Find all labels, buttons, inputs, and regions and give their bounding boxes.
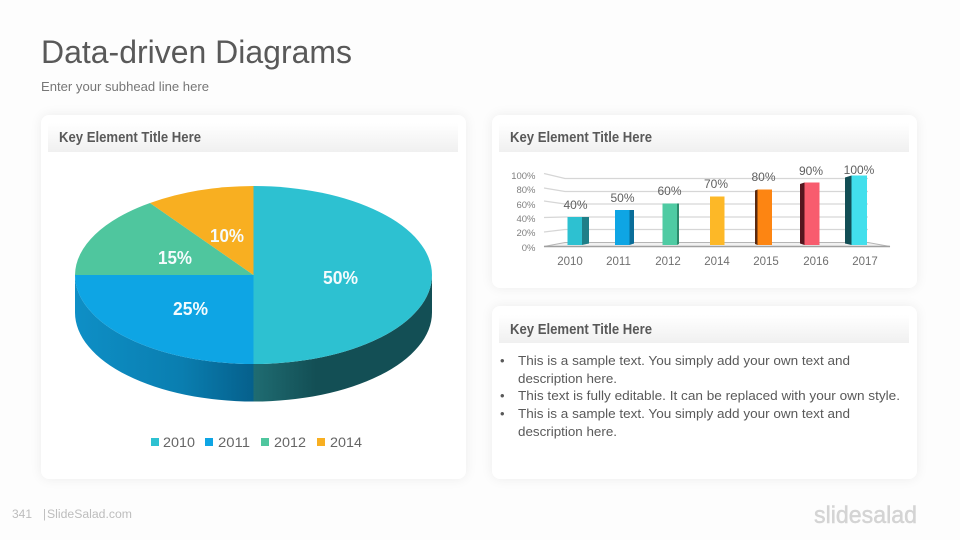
panel: bar chart card [492, 115, 917, 288]
slice 10% [150, 186, 254, 275]
bar chart [511, 163, 890, 268]
x axis labels: 2012 [655, 256, 681, 268]
value labels: 40% [563, 198, 588, 212]
pie labels: 15% [158, 248, 192, 268]
footer logo: slidesalad [814, 502, 917, 529]
value labels: 50% [610, 191, 635, 205]
heading: pie card: Key Element Title Here [59, 130, 201, 146]
legend: 2014 [330, 435, 363, 450]
pie labels: 10% [210, 226, 244, 246]
x axis labels: 2015 [753, 256, 779, 268]
bullet list: • [500, 388, 505, 403]
slice 15% [75, 203, 254, 275]
x axis labels: 2017 [852, 256, 878, 268]
y axis labels: 60% [516, 200, 536, 211]
bullet list: This is a sample text. You simply add your own text and [518, 353, 850, 368]
value labels: 90% [799, 164, 823, 178]
y axis labels: 20% [516, 228, 536, 239]
subtitle: Enter your subhead line here [41, 79, 209, 94]
bullet list: This is a sample text. You simply add your own text and [518, 406, 850, 421]
value labels: 60% [657, 184, 682, 198]
footer page number: | [43, 509, 46, 521]
bar 2012 [662, 204, 679, 245]
pie labels [158, 226, 358, 319]
y axis labels: 0% [522, 243, 536, 254]
pie labels: 50% [323, 268, 358, 288]
value labels: 100% [844, 163, 875, 177]
y axis labels: 40% [516, 214, 536, 225]
header band: pie card [48, 123, 458, 152]
bar 2011 [615, 210, 634, 245]
footer page number [12, 509, 132, 521]
x axis labels [557, 256, 878, 268]
bullet list [500, 353, 900, 439]
bullet list: description here. [518, 371, 617, 386]
bullet list: • [500, 406, 505, 421]
y axis labels [511, 171, 536, 254]
axes and grid [544, 174, 868, 232]
header band: bar card [499, 123, 909, 152]
bullet list: • [500, 353, 505, 368]
pie side: blue [75, 275, 254, 402]
panel: pie chart card [41, 115, 466, 479]
slice 25% [75, 275, 254, 364]
slice 50% [254, 186, 432, 364]
value labels: 80% [751, 170, 776, 184]
chart floor [544, 242, 890, 246]
pie chart [75, 186, 432, 402]
pie labels: 25% [173, 299, 208, 319]
pie side: teal [254, 275, 432, 402]
footer page number: 341 [12, 509, 32, 521]
x axis labels: 2016 [803, 256, 829, 268]
bar 2016 [800, 182, 820, 245]
value labels: 70% [704, 177, 728, 191]
bar 2014 [710, 196, 724, 245]
y axis labels: 80% [516, 185, 536, 196]
legend: 2012 [274, 435, 306, 450]
legend: 2011 [218, 435, 250, 450]
footer page number: SlideSalad.com [47, 509, 132, 521]
value labels [563, 163, 875, 212]
heading: text card: Key Element Title Here [510, 322, 652, 338]
bullet list: description here. [518, 424, 617, 439]
title: Data-driven Diagrams [41, 34, 352, 70]
y axis labels: 100% [511, 171, 536, 182]
x axis labels: 2014 [704, 256, 730, 268]
x axis labels: 2010 [557, 256, 583, 268]
bar 2017 [845, 176, 867, 245]
panel: text card [492, 306, 917, 479]
bar 2010 [568, 217, 589, 245]
heading: bar card: Key Element Title Here [510, 130, 652, 146]
bar 2015 [755, 190, 772, 245]
legend: 2010 [163, 435, 195, 450]
bullet list: This text is fully editable. It can be replaced with your own style. [518, 388, 900, 403]
x axis labels: 2011 [606, 256, 631, 268]
legend [151, 435, 363, 450]
header band: text card [499, 315, 909, 343]
